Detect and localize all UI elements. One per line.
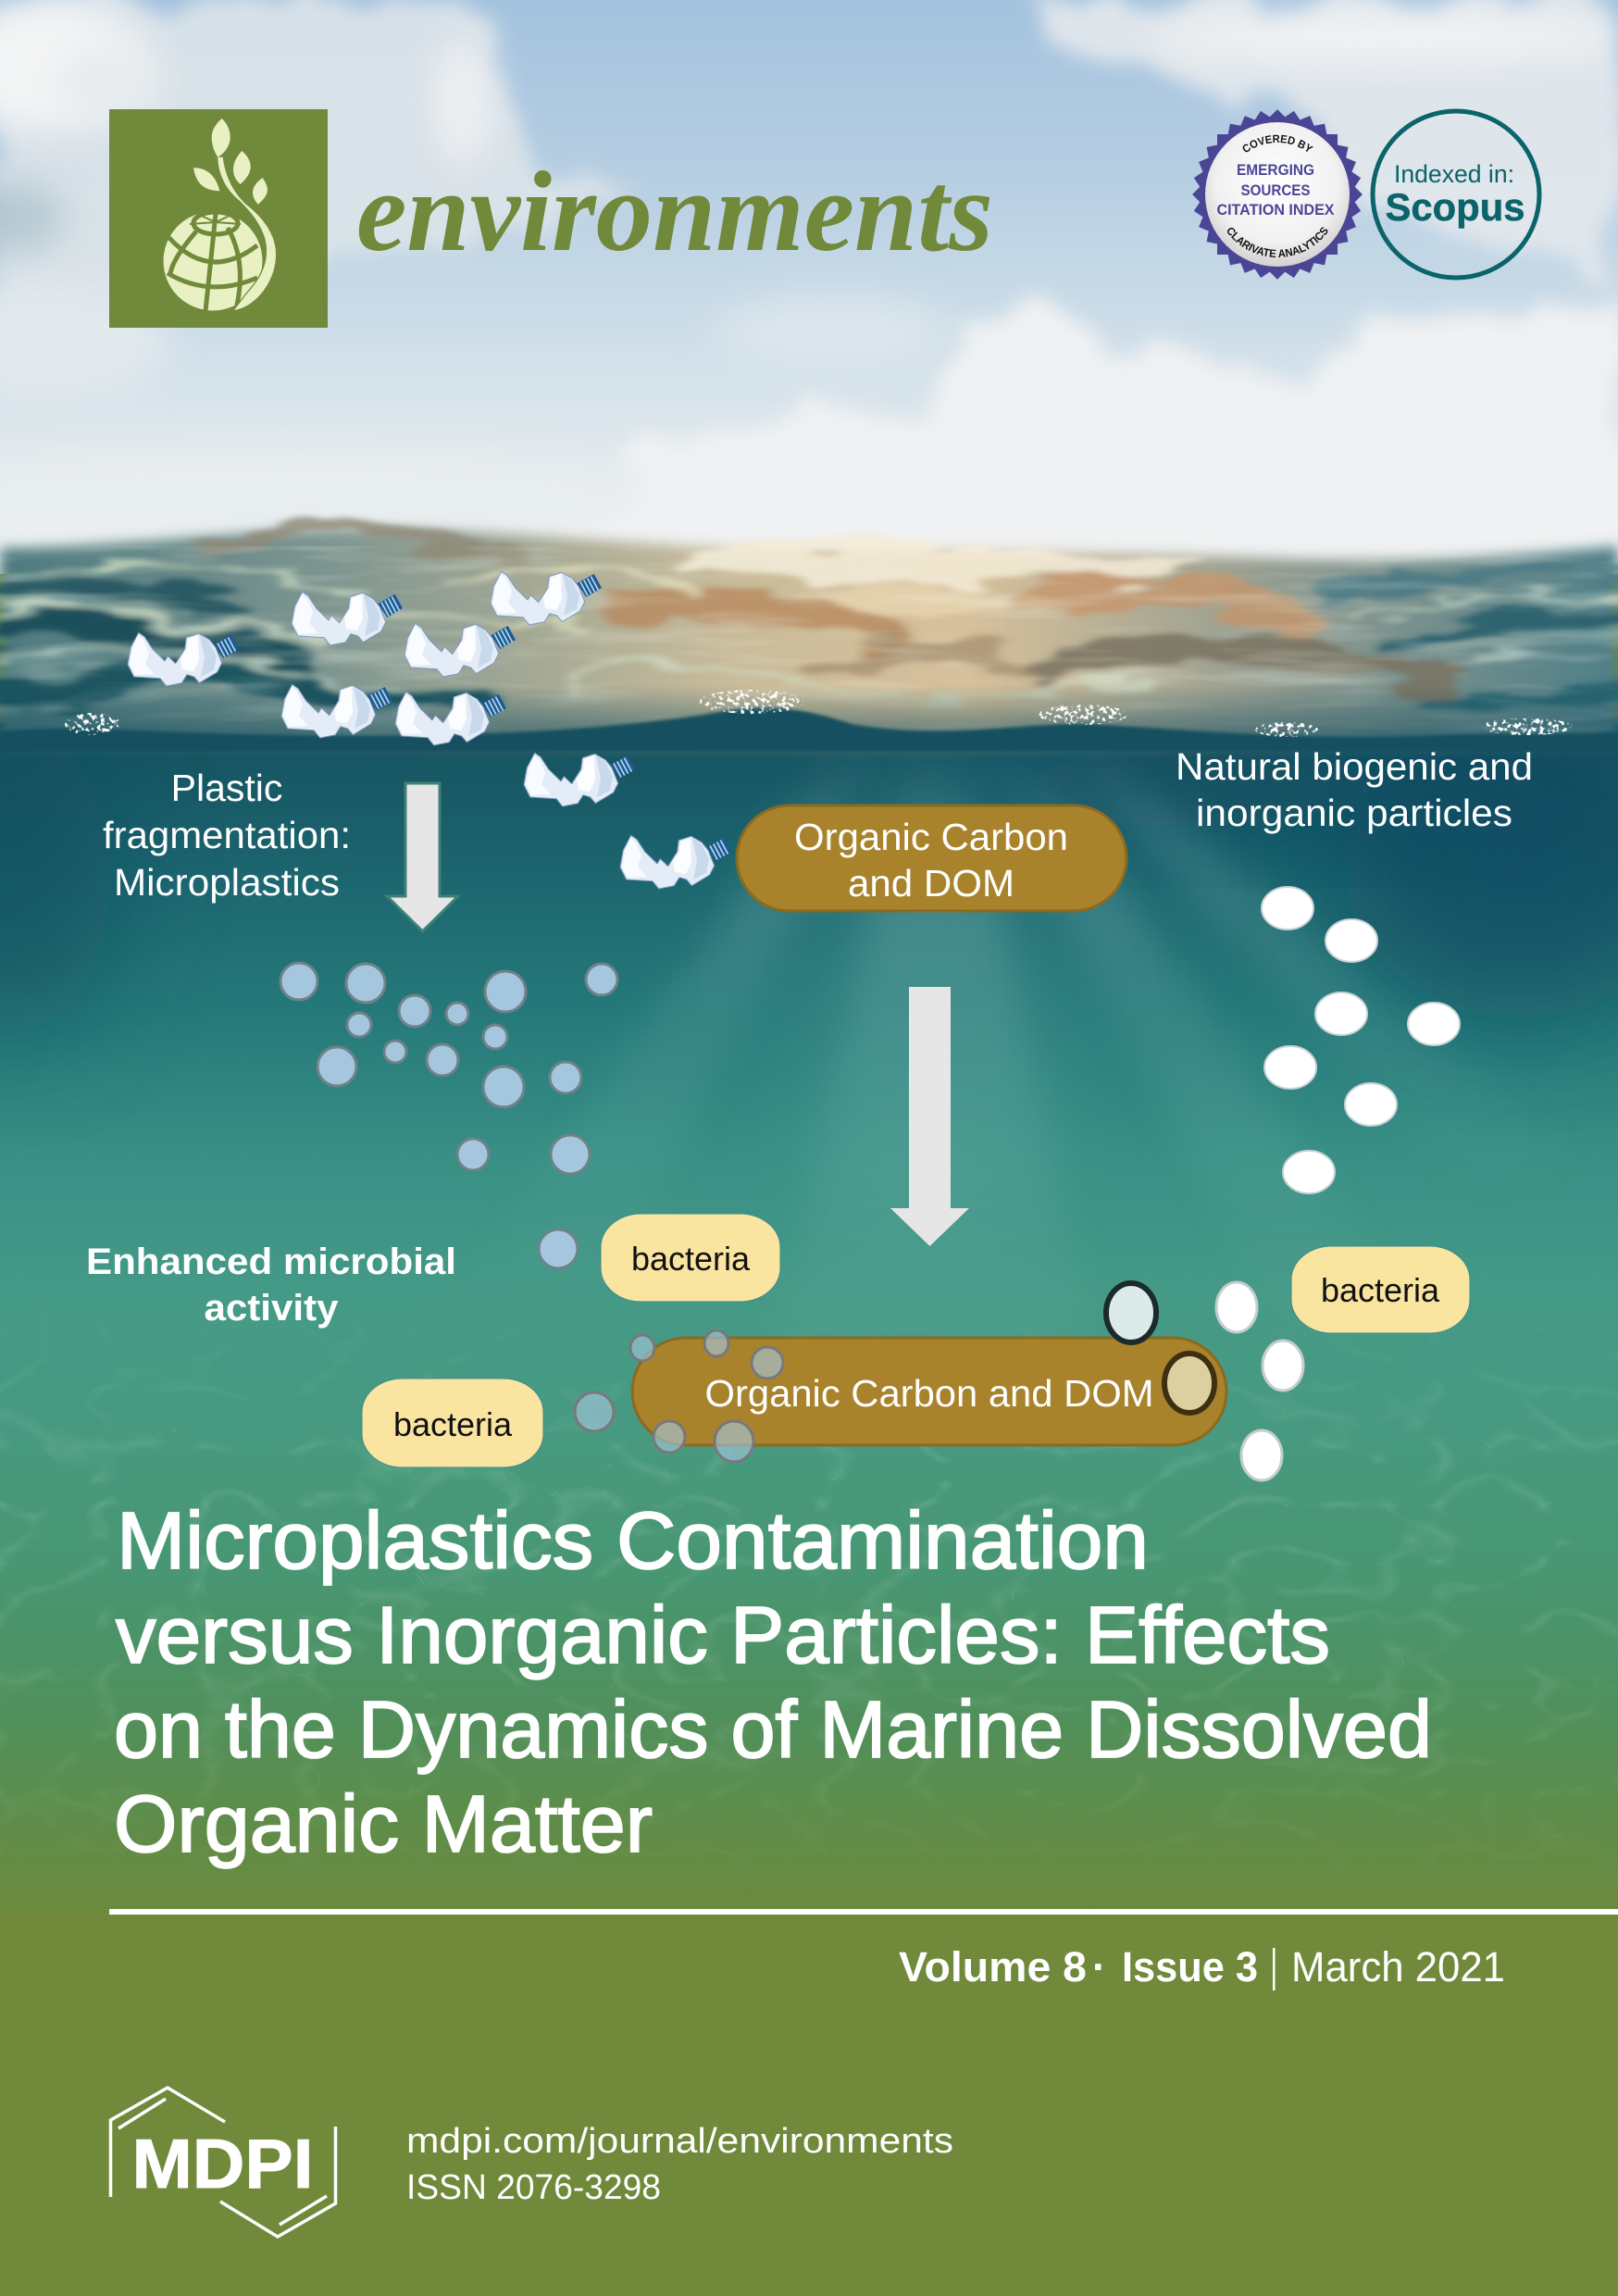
microplastic particles bbox=[280, 963, 617, 1268]
underwater background bbox=[0, 722, 1618, 1892]
label: bacteria (center) bbox=[601, 1214, 780, 1302]
label: bacteria (center): bacteria bbox=[631, 1240, 751, 1278]
sea surface bbox=[0, 529, 1618, 752]
sky background bbox=[0, 0, 1618, 574]
title: Microplastics Contamination bbox=[117, 1496, 1149, 1586]
badge: emerging sources citation index: CLARIVATE ANALYTICS bbox=[1227, 228, 1327, 257]
pill: organic carbon and DOM (top): and DOM bbox=[848, 862, 1014, 905]
icon: leaves and globe bbox=[163, 119, 276, 313]
badge: emerging sources citation index bbox=[1192, 109, 1363, 280]
title bbox=[114, 1496, 1432, 1869]
text: enhanced microbial activity: activity bbox=[204, 1288, 339, 1329]
text: plastic fragmentation: Microplastics bbox=[114, 861, 340, 904]
divider rule bbox=[109, 1909, 1618, 1915]
label: bacteria (left) bbox=[362, 1379, 543, 1467]
label: bacteria (right): bacteria bbox=[1321, 1271, 1440, 1309]
text: plastic fragmentation bbox=[103, 767, 351, 904]
issue line: Volume 8 bbox=[899, 1943, 1087, 1990]
badge: emerging sources citation index: CITATION INDEX bbox=[1216, 201, 1335, 218]
journal logo bbox=[109, 109, 328, 328]
text: plastic fragmentation: Plastic bbox=[171, 767, 282, 809]
pill: organic carbon and DOM (top) bbox=[737, 805, 1126, 911]
journal name: environments bbox=[356, 148, 993, 275]
text: enhanced microbial activity: Enhanced microbial bbox=[86, 1242, 456, 1282]
text: natural particles bbox=[1176, 745, 1533, 834]
issue line: · bbox=[1092, 1943, 1106, 1990]
label: bacteria (left): bacteria bbox=[393, 1405, 513, 1443]
badge: emerging sources citation index: SOURCES bbox=[1240, 181, 1311, 199]
icons: plastic bottles bbox=[128, 571, 731, 889]
natural white particles bbox=[1262, 887, 1460, 1193]
journal url and ISSN: mdpi.com/journal/environments bbox=[406, 2122, 953, 2161]
MDPI logo bbox=[111, 2088, 335, 2237]
issue line: March 2021 bbox=[1291, 1943, 1505, 1990]
badge: indexed in scopus: Scopus bbox=[1385, 185, 1525, 229]
title: Organic Matter bbox=[114, 1779, 653, 1869]
arrow: organic carbon downward bbox=[890, 987, 969, 1246]
journal url and ISSN bbox=[406, 2122, 953, 2207]
text: natural particles: Natural biogenic and bbox=[1176, 745, 1533, 788]
badge: indexed in scopus: Indexed in: bbox=[1394, 160, 1514, 188]
badge: emerging sources citation index: EMERGING bbox=[1237, 161, 1314, 179]
title: on the Dynamics of Marine Dissolved bbox=[114, 1685, 1432, 1775]
pill: organic carbon and DOM (lower) bbox=[632, 1338, 1226, 1445]
MDPI logo: MDPI bbox=[131, 2125, 313, 2202]
text: plastic fragmentation: fragmentation: bbox=[103, 814, 351, 856]
badge: indexed in scopus bbox=[1373, 111, 1539, 278]
pill: organic carbon and DOM (top): Organic Carbon bbox=[794, 816, 1068, 858]
text: enhanced microbial activity bbox=[86, 1242, 456, 1329]
particles attached to lower pill bbox=[575, 1282, 1303, 1480]
issue line bbox=[899, 1943, 1505, 1990]
text: natural particles: inorganic particles bbox=[1196, 792, 1512, 834]
pill: organic carbon and DOM (lower): Organic Carbon and DOM bbox=[705, 1372, 1153, 1415]
journal url and ISSN: ISSN 2076-3298 bbox=[406, 2168, 661, 2207]
badge: emerging sources citation index: COVERED BY bbox=[1242, 135, 1313, 152]
title: versus Inorganic Particles: Effects bbox=[116, 1591, 1330, 1680]
issue line: Issue 3 bbox=[1122, 1943, 1258, 1990]
arrow: fragmentation to microplastics bbox=[387, 783, 458, 931]
label: bacteria (right) bbox=[1291, 1246, 1470, 1333]
